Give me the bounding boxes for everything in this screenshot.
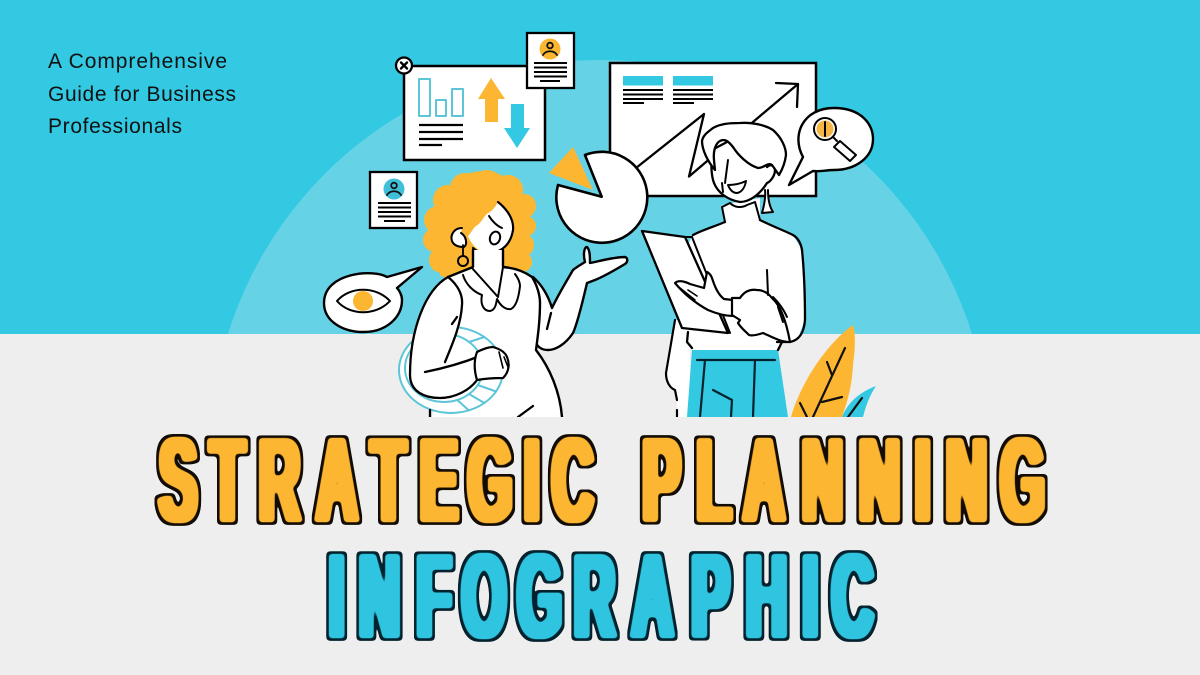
ear xyxy=(451,228,466,247)
icon: orange up arrow xyxy=(478,78,505,122)
trousers xyxy=(687,350,788,417)
icon: eye speech bubble xyxy=(324,267,422,332)
growth arrow xyxy=(636,83,798,176)
collar xyxy=(463,267,520,311)
profile card top right xyxy=(527,33,574,88)
semicircle backdrop xyxy=(228,60,972,334)
raised arm xyxy=(533,247,627,350)
woman figure xyxy=(399,170,627,420)
icon: magnifier speech bubble xyxy=(789,108,873,185)
title line 2: Infographic: INFOGRAPHIC xyxy=(329,530,873,662)
panel: chart card xyxy=(404,66,545,160)
hair xyxy=(423,170,536,282)
profile card left xyxy=(370,172,417,228)
bar chart icon xyxy=(419,79,463,116)
blue coin xyxy=(399,327,503,413)
orange leaf xyxy=(791,325,855,417)
torso and dress xyxy=(432,250,561,417)
pie chart xyxy=(549,147,647,243)
torso xyxy=(685,198,805,350)
open book xyxy=(642,231,730,333)
mouth xyxy=(488,230,502,246)
fist and sleeve xyxy=(732,290,790,342)
back hair wisp xyxy=(762,190,773,213)
icon: blue down arrow xyxy=(504,104,530,148)
face xyxy=(468,202,513,253)
panel: presentation board xyxy=(610,63,816,196)
smile and nose xyxy=(722,160,746,193)
pie wedge xyxy=(549,147,593,190)
panel: blue upper background xyxy=(0,0,1200,334)
subtitle text block: Professionals xyxy=(48,115,182,138)
left arm outline xyxy=(410,277,551,417)
blue leaf xyxy=(842,386,876,417)
subtitle text block: A Comprehensive xyxy=(48,50,227,73)
subtitle text block: Guide for Business xyxy=(48,83,236,106)
fist xyxy=(475,347,509,380)
illustration xyxy=(324,33,876,420)
icon: close button xyxy=(396,58,412,74)
face xyxy=(711,135,775,202)
hand on book xyxy=(675,272,733,316)
title line 1: Strategic Planning: STRATEGIC PLANNING xyxy=(159,414,1045,546)
subtitle text block xyxy=(48,50,236,138)
left arm xyxy=(412,326,457,350)
man figure xyxy=(642,123,805,420)
collar xyxy=(722,202,760,222)
card text lines xyxy=(419,125,463,145)
hair xyxy=(702,123,786,175)
back arm xyxy=(666,320,690,420)
earring xyxy=(458,245,468,266)
plant leaves xyxy=(791,325,876,417)
